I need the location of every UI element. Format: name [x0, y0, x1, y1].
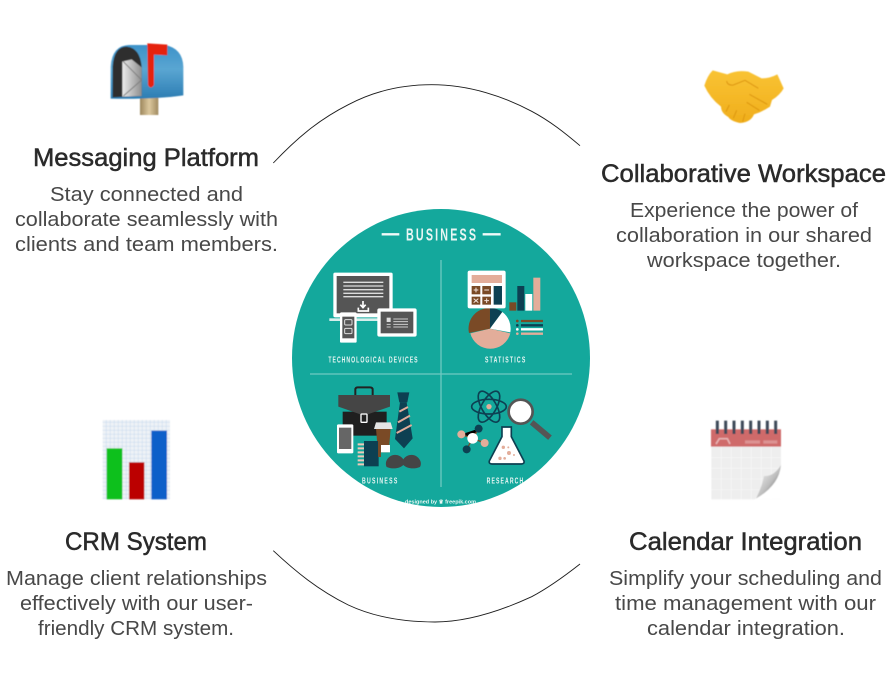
panel: central business circle — [292, 209, 590, 507]
text: workspace description: Experience the power of — [630, 200, 858, 222]
quadrant: business — [337, 387, 421, 486]
label: BUSINESS — [362, 477, 398, 486]
top connecting arc — [273, 85, 580, 163]
text: workspace description: workspace together. — [646, 250, 841, 272]
text: CRM description — [6, 568, 267, 640]
quadrant: research — [457, 388, 550, 486]
text: messaging description: clients and team members. — [15, 234, 278, 256]
circle heading: BUSINESS — [382, 226, 501, 245]
circle heading: BUSINESS: BUSINESS — [406, 226, 476, 245]
text: calendar description: time management with our — [615, 593, 876, 615]
text: messaging description — [15, 184, 278, 256]
text: calendar description — [609, 568, 882, 640]
heading: Calendar Integration: Calendar Integration — [629, 528, 862, 556]
text: calendar description: calendar integration. — [647, 618, 845, 640]
quadrant: statistics — [468, 271, 543, 365]
bottom connecting arc — [273, 551, 580, 622]
credit line: designed by ♛ freepik.com — [405, 498, 476, 506]
heading: Collaborative Workspace: Collaborative Workspace — [601, 160, 886, 188]
heading: Messaging Platform: Messaging Platform — [33, 144, 259, 172]
text: messaging description: collaborate seamlessly with — [15, 209, 278, 231]
heading: CRM System: CRM System — [65, 528, 207, 556]
label: RESEARCH — [487, 477, 523, 486]
label: STATISTICS — [485, 357, 526, 365]
icon: bar chart — [103, 420, 170, 499]
text: messaging description: Stay connected and — [50, 184, 243, 206]
text: workspace description: collaboration in our shared — [616, 225, 872, 247]
text: calendar description: Simplify your scheduling and — [609, 568, 882, 590]
quadrant: technological devices — [328, 273, 418, 365]
icon: calendar — [711, 421, 781, 499]
icon: mailbox — [111, 43, 183, 115]
text: CRM description: friendly CRM system. — [38, 618, 234, 640]
text: CRM description: effectively with our user- — [20, 593, 253, 615]
text: workspace description — [616, 200, 872, 272]
text: CRM description: Manage client relationships — [6, 568, 267, 590]
icon: handshake — [704, 70, 784, 123]
label: TECHNOLOGICAL DEVICES — [328, 357, 418, 365]
